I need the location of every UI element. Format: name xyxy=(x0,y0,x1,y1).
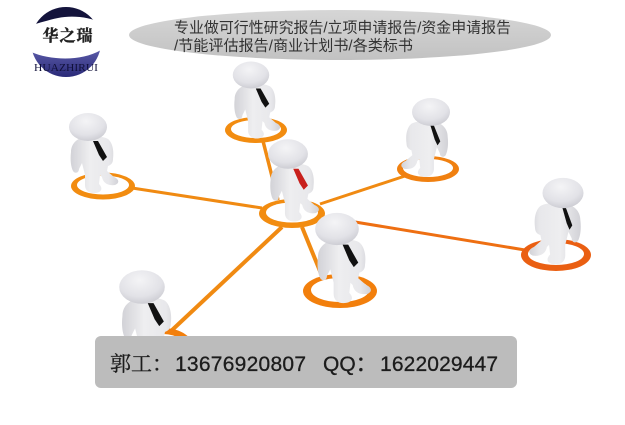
contact text: QQ： xyxy=(323,353,377,376)
services banner xyxy=(129,10,551,60)
node: top person xyxy=(225,62,287,143)
services text xyxy=(174,20,511,54)
contact text: 13676920807 xyxy=(175,353,306,376)
node: bottom left person xyxy=(119,270,195,372)
services text: 专业做可行性研究报告/立项申请报告/资金申请报告 xyxy=(174,20,511,36)
logo bottom band xyxy=(31,50,101,77)
contact text: 郭工： xyxy=(110,348,173,378)
services text: /节能评估报告/商业计划书/各类标书 xyxy=(174,38,413,54)
node: left person xyxy=(69,113,135,200)
contact text: 1622029447 xyxy=(380,353,498,376)
connecting lines xyxy=(132,141,525,332)
logo Chinese name: 华之瑞 xyxy=(42,23,94,46)
logo top crescent xyxy=(36,7,94,24)
node: front person xyxy=(303,213,377,308)
logo xyxy=(31,7,101,77)
node: upper right person xyxy=(397,98,459,182)
logo Latin name: HUAZHIRUI xyxy=(34,63,99,74)
node: far right person xyxy=(521,178,591,271)
contact box xyxy=(95,336,517,388)
node: centre person with red tie xyxy=(259,139,325,228)
contact text xyxy=(110,348,498,378)
